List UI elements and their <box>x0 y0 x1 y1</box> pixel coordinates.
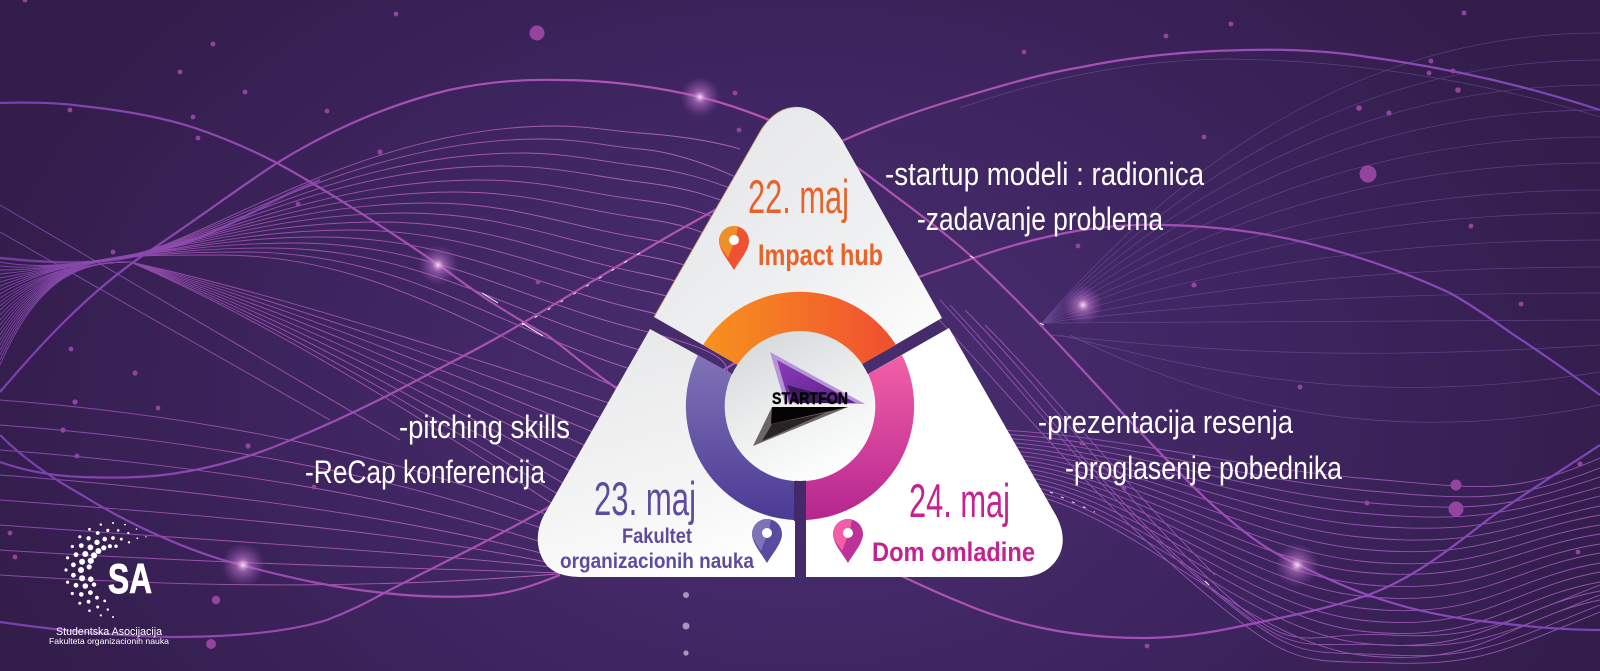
ring: pink segment <box>806 355 914 520</box>
logo: startfon <box>753 352 865 446</box>
location: Impact hub: Impact hub <box>758 239 883 272</box>
main curve: long rising arc to upper right <box>0 50 1600 478</box>
text block: day 3 activities: -prezentacija resenja <box>1038 404 1293 440</box>
glow points <box>221 77 1319 587</box>
center disk <box>725 331 875 481</box>
text block: day 1 activities <box>885 156 1204 237</box>
icon: pink location pin <box>833 519 863 563</box>
organization name: Studentska Asocijacija <box>56 626 163 638</box>
icon: dotted globe <box>64 522 147 618</box>
date: 22. maj: 22. maj <box>748 170 849 223</box>
location: Fakultet organizacionih nauka: organizacionih nauka <box>560 550 754 573</box>
panel: 22 maj (top) <box>654 107 942 365</box>
logo: startfon: STARTFON <box>772 390 848 408</box>
ring: orange segment <box>703 292 896 365</box>
wave bundle: left fan <box>0 126 740 585</box>
panel: 24 maj (right) <box>806 328 1063 577</box>
wave bundle: upper right thin fan <box>960 33 1600 422</box>
text block: day 1 activities: -startup modeli : radionica <box>885 156 1204 192</box>
icon: purple location pin <box>752 519 782 563</box>
ring: purple segment <box>686 355 794 520</box>
icon: orange location pin <box>719 226 749 270</box>
SA monogram: SA <box>108 555 152 602</box>
text block: day 1 activities: -zadavanje problema <box>917 201 1163 237</box>
location: Fakultet organizacionih nauka: Fakultet <box>622 525 692 548</box>
organization subtitle: Fakulteta organizacionih nauka <box>49 636 169 646</box>
date: 23. maj: 23. maj <box>594 472 696 525</box>
text block: day 3 activities <box>1038 404 1342 486</box>
main curve: bottom left to right mid <box>0 225 1600 637</box>
text block: day 2 activities <box>305 409 570 490</box>
location: Dom omladine: Dom omladine <box>872 537 1035 567</box>
panel: 23 maj (left) <box>538 329 795 577</box>
text block: day 3 activities: -proglasenje pobednika <box>1065 450 1342 486</box>
main curve: lower left purple <box>0 435 560 597</box>
logo: Studentska Asocijacija <box>49 522 169 646</box>
gap: lower notch in the ring <box>794 481 806 521</box>
text block: day 2 activities: -ReCap konferencija <box>305 454 545 490</box>
date: 24. maj: 24. maj <box>909 474 1010 527</box>
wave bundle: right fan <box>930 300 1600 663</box>
text block: day 2 activities: -pitching skills <box>399 409 570 445</box>
sparkles on crossing lines <box>482 253 1209 585</box>
main curve: upper left descending <box>0 103 650 412</box>
main curve: lower right wave <box>880 445 1600 638</box>
wave bundle: thick merged band <box>0 180 320 262</box>
location: Fakultet organizacionih nauka <box>560 525 754 573</box>
